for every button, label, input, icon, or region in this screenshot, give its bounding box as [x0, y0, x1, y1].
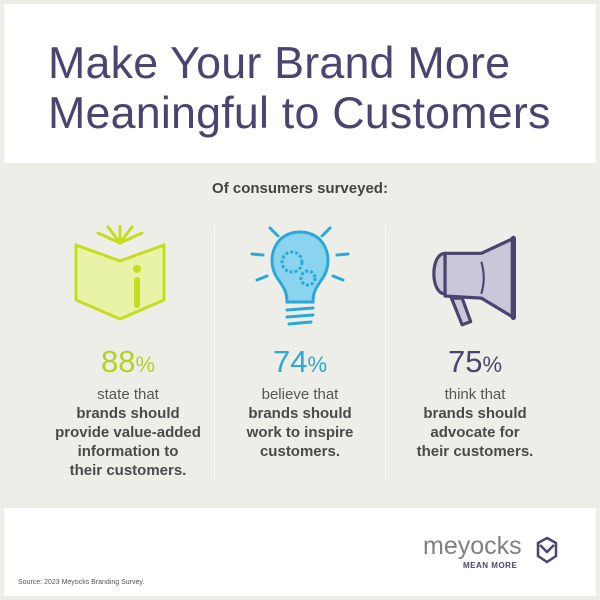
stat: 88%: their customers. [70, 462, 186, 479]
logo [423, 532, 558, 570]
stat: 74%: customers. [260, 443, 340, 460]
stat: 88%: 88% [101, 344, 155, 379]
panel: footer [4, 508, 596, 596]
icon: lightbulb [250, 226, 350, 326]
icon: megaphone [432, 236, 516, 326]
icon: book [74, 225, 166, 320]
stat: 75%: brands should [423, 405, 527, 422]
stat: 75%: think that [445, 386, 505, 403]
title: Meaningful to Customers [48, 88, 551, 138]
stat: 74% [246, 344, 353, 460]
stat: 88%: state that [97, 386, 159, 403]
stat: 74%: work to inspire [247, 424, 353, 441]
logo: meyocks [423, 532, 522, 560]
stat: 74%: brands should [248, 405, 352, 422]
stat: 75%: advocate for [430, 424, 520, 441]
title: Make Your Brand More [48, 38, 510, 88]
stat: 75% [416, 344, 533, 460]
stat: 88%: provide value-added [55, 424, 201, 441]
stat: 74%: believe that [262, 386, 338, 403]
stat: 74%: 74% [273, 344, 327, 379]
stat: 75%: 75% [448, 344, 502, 379]
source: Source: 2023 Meyocks Branding Survey. [18, 579, 144, 586]
stat: 88% [55, 344, 201, 479]
panel: title [4, 4, 596, 163]
logo: MEAN MORE [463, 561, 517, 570]
divider [214, 225, 215, 480]
stat: 75%: their customers. [417, 443, 533, 460]
stat: 88%: information to [78, 443, 178, 460]
stat: 88%: brands should [76, 405, 180, 422]
subheading: Of consumers surveyed: [212, 180, 388, 197]
title [48, 38, 551, 138]
